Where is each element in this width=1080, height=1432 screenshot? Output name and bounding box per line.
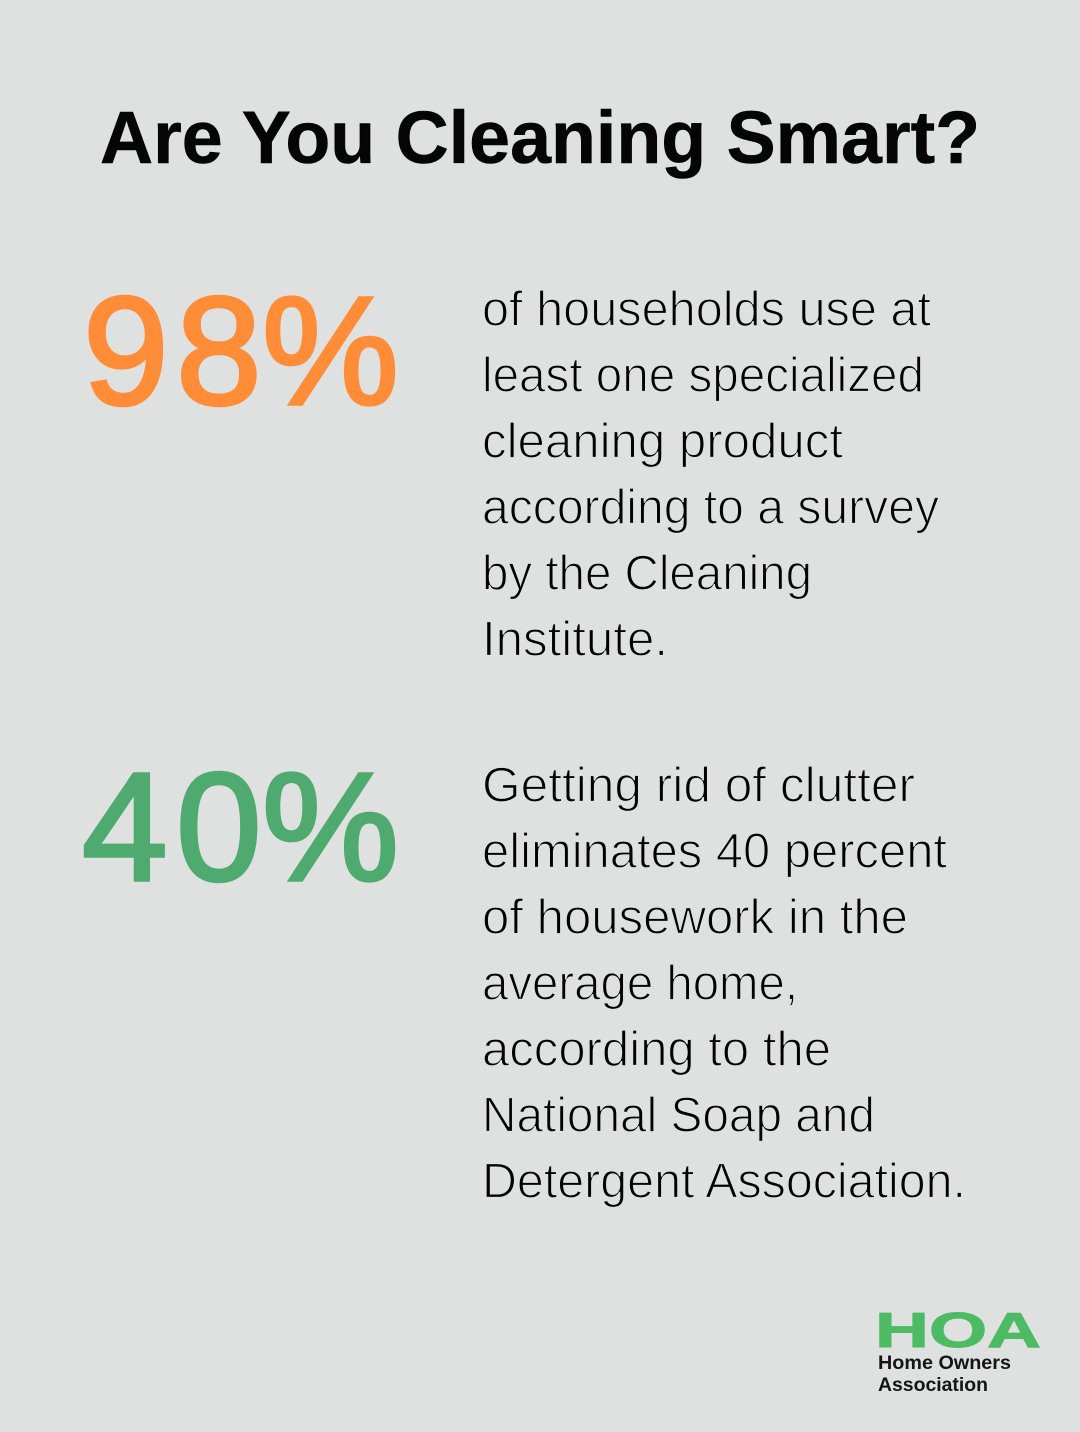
logo: Home Owners Association bbox=[875, 1304, 1041, 1396]
logo wordmark HOA: HOA bbox=[875, 1304, 1041, 1358]
logo line: Association: Association bbox=[878, 1374, 988, 1396]
text block: 40% description: of housework in the bbox=[482, 890, 908, 944]
text block: 98% description: Institute. bbox=[482, 612, 668, 666]
text block: 98% description: by the Cleaning bbox=[482, 546, 812, 600]
text block: 98% description bbox=[482, 282, 939, 666]
big number: 98%: 98% bbox=[83, 265, 399, 437]
text block: 98% description: of households use at bbox=[482, 282, 931, 336]
text block: 98% description: cleaning product bbox=[482, 414, 843, 468]
logo line: Home Owners: Home Owners bbox=[878, 1352, 1011, 1374]
big number: 40%: 40% bbox=[82, 741, 399, 913]
panel: 40% statistic bbox=[82, 741, 966, 1208]
text block: 40% description: eliminates 40 percent bbox=[482, 824, 947, 878]
text block: 40% description: according to the bbox=[482, 1022, 831, 1076]
text block: 40% description: National Soap and bbox=[482, 1088, 875, 1142]
text block: 40% description: Detergent Association. bbox=[482, 1154, 966, 1208]
text block: 98% description: according to a survey bbox=[482, 480, 939, 534]
title: Are You Cleaning Smart? bbox=[100, 96, 980, 179]
text block: 98% description: least one specialized bbox=[482, 348, 924, 402]
text block: 40% description bbox=[482, 758, 966, 1208]
text block: 40% description: Getting rid of clutter bbox=[482, 758, 915, 812]
text block: 40% description: average home, bbox=[482, 956, 798, 1010]
panel: 98% statistic bbox=[83, 265, 939, 666]
